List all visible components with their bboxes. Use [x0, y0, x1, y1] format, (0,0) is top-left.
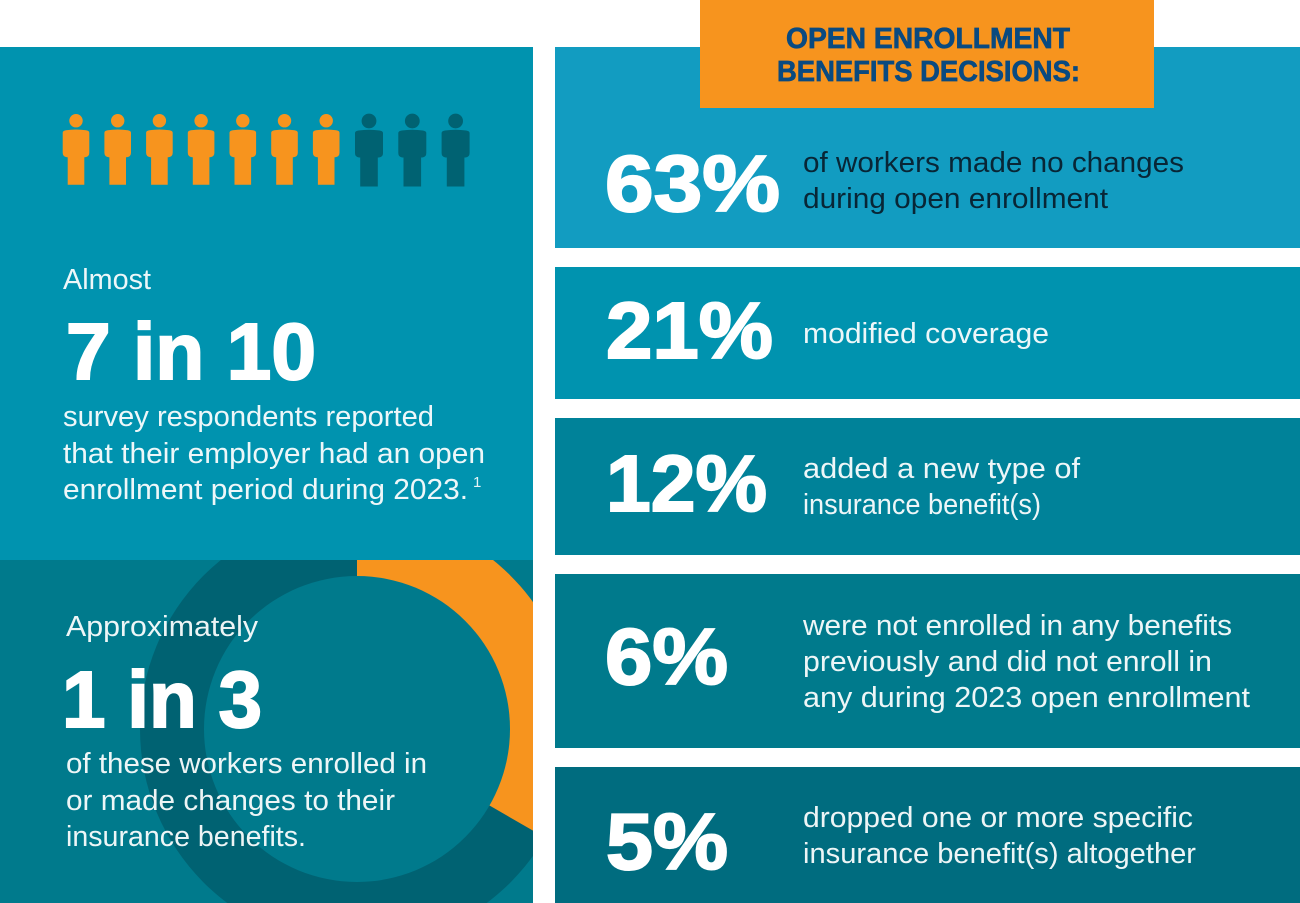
- panel: one in three workers: [0, 560, 533, 903]
- text: made no changes: of workers made no changes: [803, 147, 1184, 179]
- text: workers description: [66, 748, 427, 853]
- text: modified coverage: modified coverage: [803, 318, 1049, 350]
- text: workers description: insurance benefits.: [66, 821, 306, 853]
- text: not enrolled: were not enrolled in any benefits: [802, 610, 1232, 642]
- stat: 5%: 5%: [606, 797, 728, 886]
- text: added a new type: added a new type of: [803, 453, 1081, 485]
- text: dropped benefit: [803, 802, 1196, 870]
- header: open enrollment benefits decisions: [700, 0, 1154, 108]
- text: survey respondents description: 1: [473, 474, 481, 491]
- stat: 21%: 21%: [606, 286, 773, 375]
- text: not enrolled: any during 2023 open enrollment: [803, 682, 1250, 714]
- stat: 63%: 63%: [605, 139, 780, 228]
- text: made no changes: during open enrollment: [803, 183, 1108, 215]
- donut chart: one third highlighted: [140, 560, 533, 903]
- row: 6 percent not enrolled: [555, 574, 1300, 748]
- text: workers description: or made changes to their: [66, 785, 395, 817]
- text: survey respondents description: [63, 401, 485, 506]
- row: 12 percent added new benefit: [555, 418, 1300, 555]
- heading: 1 in 3: 1 in 3: [62, 655, 262, 744]
- panel: seven in ten respondents: [0, 47, 533, 560]
- text: dropped benefit: insurance benefit(s) altogether: [803, 838, 1196, 870]
- text: dropped benefit: dropped one or more specific: [803, 802, 1193, 834]
- row: 63 percent made no changes: [555, 47, 1300, 248]
- text: survey respondents description: survey respondents reported: [63, 401, 434, 433]
- row: 5 percent dropped benefit: [555, 767, 1300, 903]
- text: added a new type: [803, 453, 1081, 521]
- text: workers description: of these workers enrolled in: [66, 748, 427, 780]
- text: not enrolled: previously and did not enroll in: [803, 646, 1212, 678]
- header: open enrollment benefits decisions: OPEN ENROLLMENT: [786, 23, 1070, 55]
- text: made no changes: [803, 147, 1184, 215]
- text: survey respondents description: enrollment period during 2023.: [63, 474, 468, 506]
- stat: 12%: 12%: [606, 439, 767, 528]
- text: not enrolled: [802, 610, 1250, 714]
- text: Almost: Almost: [63, 264, 151, 296]
- stat: 6%: 6%: [605, 612, 728, 701]
- text: Approximately: Approximately: [66, 611, 259, 643]
- text: added a new type: insurance benefit(s): [803, 489, 1041, 521]
- header: open enrollment benefits decisions: BENEFITS DECISIONS:: [777, 56, 1080, 88]
- heading: 7 in 10: 7 in 10: [66, 307, 316, 396]
- icon row: 7 of 10 people highlighted: [63, 114, 470, 186]
- row: 21 percent modified coverage: [555, 267, 1300, 399]
- text: survey respondents description: that their employer had an open: [63, 438, 485, 470]
